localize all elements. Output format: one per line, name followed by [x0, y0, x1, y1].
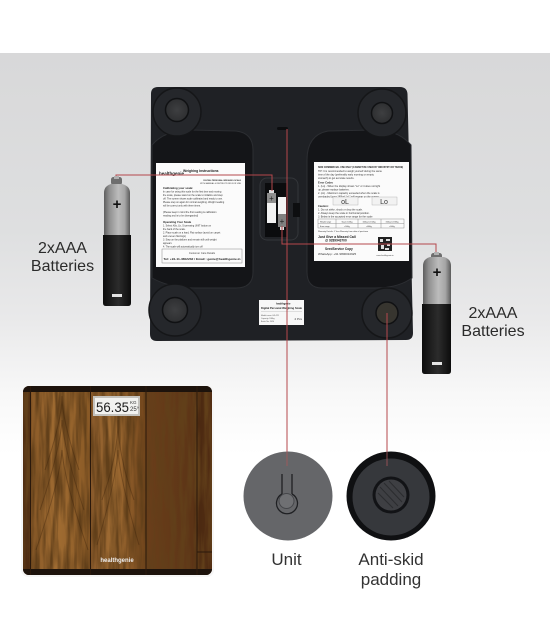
error code boxes	[333, 197, 397, 206]
product label	[259, 300, 304, 325]
instruction label: weighing instructions: In case for using this scale for the first time and moving	[163, 190, 222, 194]
error range table: 100kg to 150kg	[363, 220, 375, 224]
product label: Model name: HD-221	[261, 315, 279, 317]
error range table: Error range	[320, 225, 330, 228]
wooden scale product	[21, 384, 214, 577]
error range table: ±800g	[366, 226, 372, 228]
label: right batteries: 2xAAA	[469, 305, 518, 322]
instruction label: weighing instructions: WITH MANUAL & INSTRUCTIONS FOR USE	[200, 182, 242, 185]
foot: top left	[153, 88, 201, 136]
instruction label: weighing instructions: 2. Place scale on a hard, Flat surface (avoid on carpet	[163, 232, 221, 234]
compartment battery left: +	[269, 194, 274, 203]
error range table	[318, 219, 404, 228]
instruction label: non commercial: overloaded (over 180kg) "oL" will appear on the screen.	[318, 196, 380, 198]
instruction label: non commercial	[314, 162, 409, 261]
instruction label: non commercial: 1. (Lo) - When the display shows "Lo" or it does not light	[318, 185, 380, 188]
error range table: Weight range	[320, 220, 331, 224]
instruction label: weighing instructions: 4. The scale will automatically turn off	[163, 246, 203, 248]
instruction label: weighing instructions: Tel: +91-11-4602232 / Email : genie@healthgenie.in	[164, 257, 241, 261]
LCD display: KG	[130, 400, 137, 405]
error range table: 5kg to 100kg	[342, 220, 352, 224]
instruction label: weighing instructions: appears	[163, 242, 172, 245]
callout lines	[116, 129, 436, 466]
error code boxes: Lo	[380, 199, 388, 206]
LCD display: 25°	[130, 407, 140, 413]
label: left batteries: Batteries	[31, 258, 94, 275]
instruction label: non commercial: Just Give a Missed Call	[318, 235, 356, 239]
error code boxes: oL	[341, 199, 349, 206]
instruction label: weighing instructions: will be correct only with three times.	[163, 204, 201, 208]
instruction label: weighing instructions: DIGITAL PERSONAL WEIGHING SCALE	[203, 179, 242, 182]
foot: top right	[358, 89, 406, 137]
instruction label: non commercial: @ 9289943700	[325, 238, 347, 242]
instruction label: weighing instructions: reading and is to be disregarded)	[163, 214, 198, 218]
instruction label: non commercial: Caution:	[318, 204, 329, 208]
instruction label: non commercial: time of the day (preferably early morning on empty	[318, 174, 375, 176]
battery compartment	[260, 178, 300, 240]
detail: anti-skid pad	[346, 452, 436, 540]
LCD display: 56.35	[96, 399, 129, 415]
product label: healthgenie	[276, 302, 291, 306]
instruction label: non commercial: Error Codes	[318, 180, 334, 184]
product label: Capacity: 180kg	[261, 317, 275, 320]
right battery: +	[433, 264, 442, 281]
product label: 2 Pcs	[294, 317, 302, 321]
QR code	[378, 237, 392, 251]
product label: Batch No: 2024	[261, 320, 274, 323]
error range table: 150kg to 180kg	[386, 220, 398, 224]
detail: unit button	[244, 452, 332, 540]
recessed right panel	[307, 130, 412, 288]
instruction label: weighing instructions: the back of the scale.	[163, 228, 186, 231]
callout line ends over details	[287, 451, 387, 466]
left battery: +	[113, 196, 122, 213]
instruction label: weighing instructions	[156, 163, 245, 267]
foot: bottom right	[362, 288, 412, 338]
instruction label: weighing instructions: Weighing Instructions	[183, 169, 219, 173]
instruction label: non commercial: 3. Below is the accepted error range for the scale	[318, 216, 373, 218]
instruction label: weighing instructions: 3. Step on the platform and remain still until weight	[163, 238, 217, 242]
LCD display	[93, 396, 140, 416]
instruction label: non commercial: 2. (oL) - Maximum capacity exceeded when the scale is	[318, 192, 380, 195]
right battery	[422, 252, 451, 374]
instruction label: weighing instructions: the scale, please stand on the scale to initialize and step	[163, 194, 223, 197]
foot: bottom left	[149, 284, 201, 336]
error range table: ±900g	[389, 226, 395, 228]
error range table: ±500g	[344, 226, 350, 228]
instruction label: non commercial: up, please replace batteries.	[318, 188, 350, 192]
instruction label: weighing instructions: Customer Care Details	[189, 251, 216, 255]
instruction label: non commercial: or	[338, 243, 340, 246]
instruction label: weighing instructions: off. The screen shows scale calibrated and ready to use.	[163, 198, 223, 200]
instruction label: weighing instructions: 1. Select Kilo, Lb, St pressing UNIT button on	[163, 224, 212, 228]
instruction label: non commercial: 2. Always keep the scale in horizontal position.	[318, 212, 370, 215]
instruction label: weighing instructions: and uneven floorings)	[163, 235, 186, 238]
label: left batteries: 2xAAA	[38, 240, 87, 257]
instruction label: non commercial: TIP: It is recommended to weigh yourself during the same	[318, 170, 383, 173]
unit switch slot	[277, 127, 288, 130]
instruction label: weighing instructions: Calibrating your scale:	[163, 186, 193, 190]
compartment battery right: +	[280, 217, 285, 226]
instruction label: weighing instructions: (Please keep in mind the first reading is calibration	[163, 211, 217, 214]
instruction label: weighing instructions: Operating Your Scale	[163, 220, 192, 224]
instruction label: non commercial: Warranty Details: 1 Year Warranty from date of purchase	[318, 230, 369, 233]
label: right batteries: Batteries	[461, 323, 525, 340]
instruction label: weighing instructions: healthgenie	[159, 171, 185, 176]
label: anti-skid padding: Anti-skid	[358, 550, 424, 569]
label: unit: Unit	[271, 550, 302, 569]
instruction label: non commercial: SeedService Copy	[325, 247, 353, 251]
instruction label: non commercial: 1. Do not strike, shock or drop the scale.	[318, 208, 363, 212]
instruction label: non commercial: NON COMMERCIAL USE ONLY (CANNOT BE USED BY INDUSTRY OR TRADE)	[318, 166, 403, 169]
brand logo: healthgenie	[100, 558, 134, 564]
instruction label: weighing instructions: Please step on again for normal weighing. Weight reading	[163, 201, 225, 204]
instruction label: non commercial: stomach) to get accurate results.	[318, 177, 355, 180]
label: anti-skid padding: padding	[361, 570, 421, 589]
instruction label: non commercial: WhatsApp: +91 9800010925	[318, 252, 356, 256]
product label: Digital Personal Weighing Scale	[261, 306, 302, 310]
left battery	[103, 176, 131, 306]
instruction label: non commercial: www.healthgenie.in	[376, 254, 394, 257]
scale underside	[149, 87, 413, 341]
recessed left panel	[152, 130, 253, 288]
